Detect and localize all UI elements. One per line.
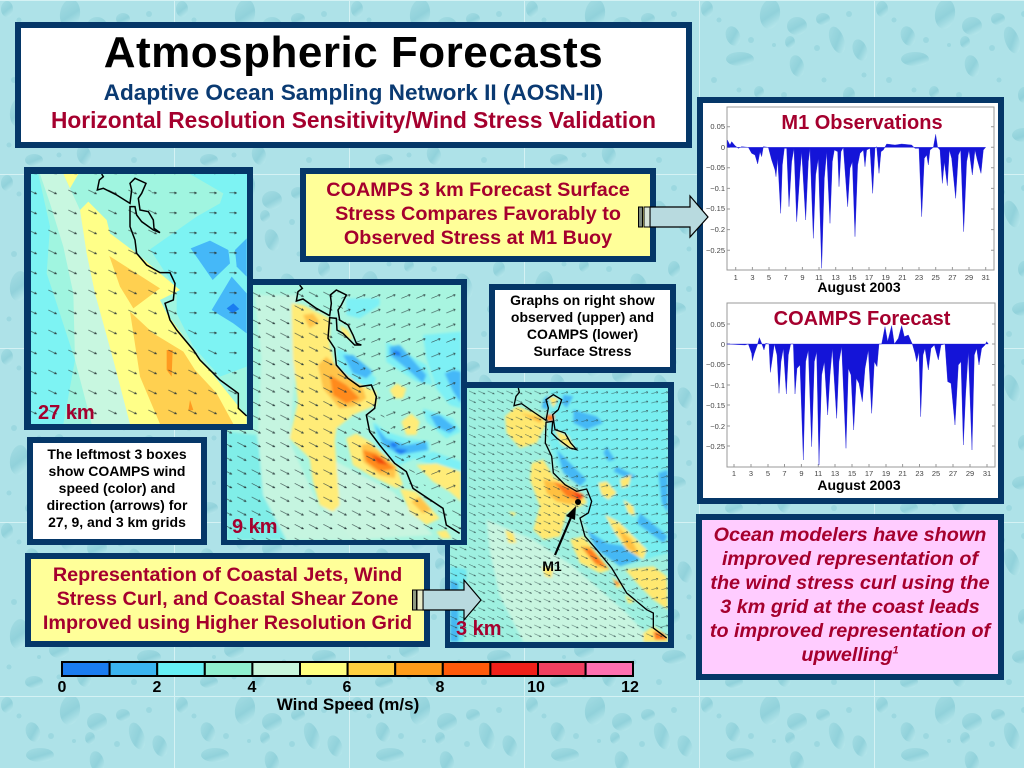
chart: COAMPS forecast: 0 — [721, 340, 725, 349]
chart: M1 observations: 29 — [965, 273, 973, 282]
chart: COAMPS forecast: 7 — [782, 469, 787, 478]
colour legend: wind speed: 6 — [343, 679, 352, 696]
colour legend: wind speed: 8 — [436, 679, 445, 696]
chart: COAMPS forecast: −0.05 — [706, 360, 725, 369]
chart: COAMPS forecast: −0.1 — [710, 381, 725, 390]
colour legend: wind speed: Wind Speed (m/s) — [277, 695, 419, 714]
chart: COAMPS forecast: COAMPS Forecast — [774, 308, 951, 330]
chart: COAMPS forecast: −0.25 — [706, 442, 725, 451]
text box: ocean modelers conclusion — [696, 514, 1004, 680]
chart: M1 observations: 3 — [750, 273, 754, 282]
main title: Atmospheric Forecasts — [104, 28, 603, 77]
colour legend: wind speed: 12 — [621, 679, 639, 696]
chart: M1 observations: 7 — [784, 273, 788, 282]
chart: M1 observations — [706, 106, 994, 295]
chart: M1 observations: 11 — [815, 273, 823, 282]
chart: M1 observations: 13 — [832, 273, 840, 282]
chart: M1 observations: 19 — [882, 273, 890, 282]
chart: M1 observations: −0.25 — [706, 246, 725, 255]
chart: COAMPS forecast: 19 — [882, 469, 890, 478]
text box: COAMPS comparison: Observed Stress at M1 Buoy — [344, 227, 612, 249]
text box: higher resolution: Stress Curl, and Coastal Shear Zone — [57, 588, 398, 610]
text box: graph explanation: COAMPS (lower) — [527, 326, 638, 342]
chart: M1 observations: 23 — [915, 273, 923, 282]
text box: map explanation: The leftmost 3 boxes — [47, 446, 187, 462]
chart: M1 observations: 9 — [800, 273, 804, 282]
chart: M1 observations: −0.15 — [706, 204, 725, 213]
label: 27 km: 27 km — [38, 402, 95, 424]
chart: M1 observations: 25 — [932, 273, 940, 282]
text box: ocean modelers conclusion: improved representation of — [722, 548, 978, 570]
map panel: 27 km grid — [24, 167, 253, 430]
chart: COAMPS forecast: −0.2 — [710, 422, 725, 431]
text box: ocean modelers conclusion: upwelling1 — [801, 644, 899, 666]
chart: COAMPS forecast: 5 — [766, 469, 770, 478]
chart: M1 observations: −0.1 — [710, 184, 725, 193]
chart: M1 observations: August 2003 — [817, 279, 901, 295]
colour legend: wind speed: 4 — [248, 679, 257, 696]
chart: M1 observations: 21 — [898, 273, 907, 282]
chart: COAMPS forecast — [706, 302, 996, 493]
text box: higher resolution — [25, 553, 430, 647]
chart: M1 observations: −0.2 — [710, 225, 725, 234]
chart: COAMPS forecast: 27 — [949, 469, 957, 478]
text box: higher resolution: Representation of Coastal Jets, Wind — [53, 564, 402, 586]
chart: M1 observations: 0.05 — [710, 122, 725, 131]
chart: COAMPS forecast: 17 — [865, 469, 873, 478]
text box: graph explanation: observed (upper) and — [511, 309, 654, 325]
chart: M1 observations: M1 Observations — [781, 112, 943, 134]
subtitle: topic: Horizontal Resolution Sensitivity/Wind Stress Validation — [51, 107, 656, 133]
colour legend: wind speed: 0 — [58, 679, 67, 696]
chart: M1 observations: 1 — [734, 273, 738, 282]
text box: map explanation — [27, 437, 207, 545]
chart: COAMPS forecast: 13 — [831, 469, 839, 478]
text box: ocean modelers conclusion: the wind stress curl using the — [710, 572, 990, 594]
text box: higher resolution: Improved using Higher Resolution Grid — [43, 612, 412, 634]
text box: COAMPS comparison: COAMPS 3 km Forecast Surface — [326, 179, 630, 201]
text box: ocean modelers conclusion: to improved representation of — [710, 620, 990, 642]
text box: map explanation: direction (arrows) for — [47, 497, 187, 513]
colour legend: wind speed — [58, 661, 639, 714]
text box: ocean modelers conclusion: Ocean modelers have shown — [714, 524, 986, 546]
chart: COAMPS forecast: 15 — [848, 469, 856, 478]
chart: COAMPS forecast: 1 — [732, 469, 736, 478]
callout: M1 buoy marker: M1 — [542, 558, 562, 574]
coastline — [97, 174, 247, 416]
callout: M1 buoy marker — [542, 499, 581, 574]
text box: graph explanation — [489, 284, 676, 373]
chart: COAMPS forecast: 29 — [966, 469, 974, 478]
chart: COAMPS forecast: 25 — [932, 469, 940, 478]
chart: M1 observations: 27 — [948, 273, 957, 282]
map panel: 9 km grid — [221, 279, 467, 545]
label: 3 km: 3 km — [456, 618, 502, 640]
text box: COAMPS comparison: Stress Compares Favorably to — [335, 203, 621, 225]
map panel: 3 km grid — [445, 382, 674, 648]
subtitle: network name: Adaptive Ocean Sampling Network II (AOSN-II) — [104, 80, 603, 105]
text box: map explanation: show COAMPS wind — [49, 463, 185, 479]
text box: graph explanation: Graphs on right show — [510, 292, 655, 308]
chart: COAMPS forecast: 9 — [799, 469, 803, 478]
coastline — [296, 285, 460, 533]
text box: map explanation: speed (color) and — [59, 480, 175, 496]
panel: surface stress charts — [697, 97, 1004, 504]
chart: COAMPS forecast: 11 — [814, 469, 822, 478]
text box: map explanation: 27, 9, and 3 km grids — [48, 514, 186, 530]
chart: COAMPS forecast: 0.05 — [710, 320, 725, 329]
chart: M1 observations: 5 — [767, 273, 771, 282]
chart: M1 observations: 31 — [982, 273, 990, 282]
chart: COAMPS forecast: 3 — [749, 469, 753, 478]
title panel — [15, 22, 692, 148]
chart: COAMPS forecast: August 2003 — [817, 477, 901, 493]
chart: M1 observations: 17 — [865, 273, 873, 282]
legend bar — [62, 662, 633, 676]
text box: ocean modelers conclusion: 3 km grid at the coast leads — [720, 596, 980, 618]
coastline — [514, 388, 667, 638]
arrow: to M1 observations chart — [638, 194, 709, 239]
label: 9 km: 9 km — [232, 516, 278, 538]
chart: COAMPS forecast: 21 — [898, 469, 907, 478]
text box: COAMPS comparison — [300, 168, 656, 262]
chart: COAMPS forecast: −0.15 — [706, 401, 725, 410]
colour legend: wind speed: 2 — [153, 679, 162, 696]
text box: graph explanation: Surface Stress — [533, 343, 632, 359]
chart: M1 observations: −0.05 — [706, 163, 725, 172]
colour legend: wind speed: 10 — [527, 679, 545, 696]
chart: M1 observations: 0 — [721, 143, 725, 152]
chart: M1 observations: 15 — [848, 273, 857, 282]
chart: COAMPS forecast: 23 — [915, 469, 924, 478]
arrow: to 3 km map — [412, 578, 482, 622]
chart: COAMPS forecast: 31 — [983, 469, 991, 478]
